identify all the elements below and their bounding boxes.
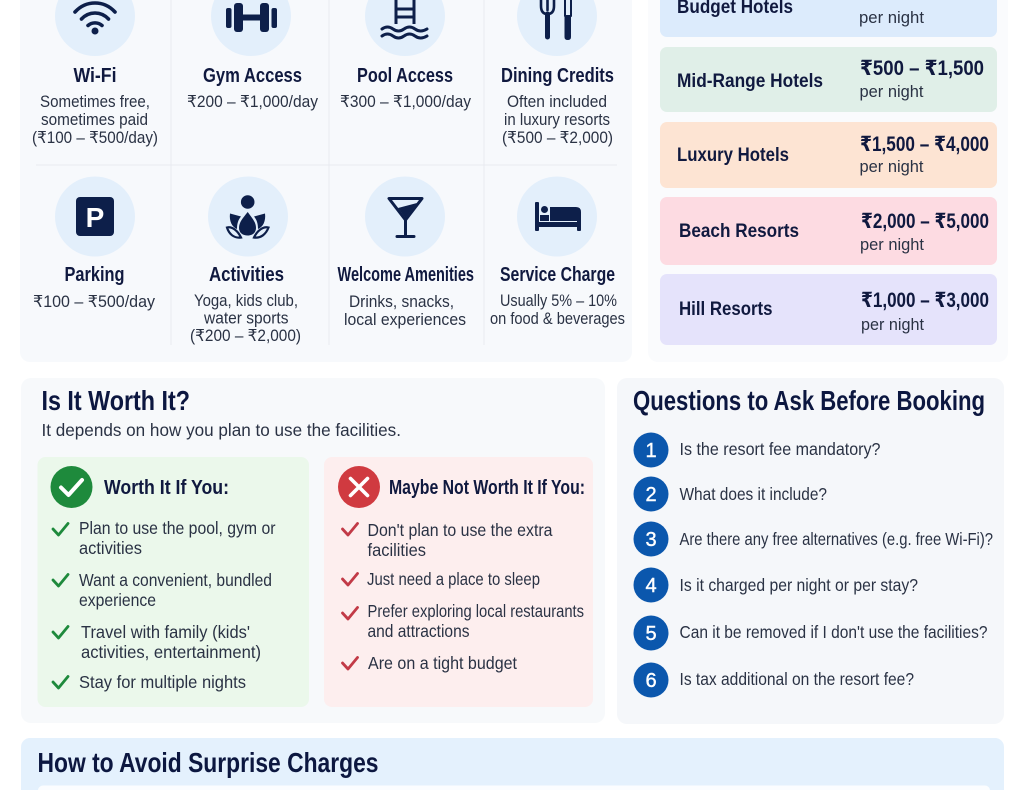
icon: green check circle xyxy=(50,466,92,508)
question 4 xyxy=(634,568,918,602)
amenity: Pool Access: Pool Access xyxy=(357,65,453,87)
amenity: Welcome Amenities: Welcome Amenities xyxy=(338,264,474,286)
row: Hill Resorts xyxy=(660,274,997,345)
card: worth it: activities xyxy=(79,538,142,558)
amenity: Activities: Yoga, kids club, xyxy=(194,292,298,310)
card: worth it: Want a convenient, bundled xyxy=(79,570,272,590)
row: Beach Resorts: ₹2,000 – ₹5,000 xyxy=(861,210,989,233)
amenity: Activities: Activities xyxy=(209,264,284,286)
question 1 xyxy=(634,432,881,468)
amenity: Activities xyxy=(190,176,301,345)
card: worth it: Worth It If You: xyxy=(104,477,229,499)
question 3 xyxy=(634,522,993,556)
card: worth it: Stay for multiple nights xyxy=(79,672,246,692)
row: Mid-Range Hotels: per night xyxy=(860,82,924,101)
amenity: Gym Access: ₹200 – ₹1,000/day xyxy=(187,93,319,111)
amenity: Parking: ₹100 – ₹500/day xyxy=(33,293,156,311)
amenity: Welcome Amenities: local experiences xyxy=(344,311,466,329)
icon: bed xyxy=(535,202,581,231)
amenity: Dining Credits: Often included xyxy=(507,93,607,111)
card: maybe not worth it: Maybe Not Worth It If You: xyxy=(389,477,585,499)
amenity: Wi-Fi: Wi-Fi xyxy=(74,65,116,87)
row: Hill Resorts: Hill Resorts xyxy=(679,298,773,320)
icon: fork and knife xyxy=(541,0,571,40)
amenity: Gym Access xyxy=(187,0,319,111)
amenity: Wi-Fi: (₹100 – ₹500/day) xyxy=(32,129,158,147)
question 4: 4 xyxy=(645,575,657,597)
amenity: Dining Credits: (₹500 – ₹2,000) xyxy=(502,129,613,147)
row: Luxury Hotels: per night xyxy=(860,157,924,176)
icon: pool ladder xyxy=(382,0,427,38)
row: Hill Resorts: per night xyxy=(861,315,924,334)
question 3: 3 xyxy=(645,529,657,551)
question 5 xyxy=(634,616,988,650)
question 2 xyxy=(634,476,827,512)
card: maybe not worth it: Just need a place to sleep xyxy=(367,569,540,589)
question 4: Is it charged per night or per stay? xyxy=(680,575,918,595)
card: worth it: activities, entertainment) xyxy=(81,642,261,662)
icon: dumbbell xyxy=(226,3,277,32)
amenity: Service Charge: on food & beverages xyxy=(490,310,625,328)
card: tips xyxy=(38,786,990,790)
amenity: Dining Credits: Dining Credits xyxy=(501,65,614,87)
icon: cocktail glass xyxy=(389,198,422,236)
amenity: Service Charge xyxy=(490,176,625,328)
amenity: Pool Access: ₹300 – ₹1,000/day xyxy=(340,93,472,111)
heading: Is It Worth It?: Is It Worth It? xyxy=(42,385,190,416)
row: Luxury Hotels xyxy=(660,122,997,188)
panel: questions to ask before booking xyxy=(617,378,1004,724)
row: Budget Hotels: per night xyxy=(859,8,924,27)
amenity: Dining Credits xyxy=(501,0,614,147)
question 6: 6 xyxy=(645,670,657,692)
amenity: Activities: water sports xyxy=(203,310,288,328)
row: Beach Resorts: Beach Resorts xyxy=(679,220,799,242)
heading: How to Avoid Surprise Charges: How to Avoid Surprise Charges xyxy=(38,747,378,778)
subheading: It depends on how you plan to use the facilities. xyxy=(42,420,401,440)
amenity: Welcome Amenities xyxy=(338,176,474,329)
card: maybe not worth it: Prefer exploring local restaurants xyxy=(368,601,584,621)
icon: lotus xyxy=(227,195,268,238)
question 1: Is the resort fee mandatory? xyxy=(680,439,881,459)
amenity: Pool Access xyxy=(340,0,472,111)
icon: red cross circle xyxy=(338,466,380,508)
question 2: 2 xyxy=(645,484,657,506)
amenity: Dining Credits: in luxury resorts xyxy=(504,111,610,129)
row: Mid-Range Hotels: Mid-Range Hotels xyxy=(677,70,823,92)
question 6: Is tax additional on the resort fee? xyxy=(680,669,914,689)
row: Budget Hotels xyxy=(660,0,997,37)
card: worth it xyxy=(38,457,309,707)
card: maybe not worth it xyxy=(324,457,593,707)
row: Beach Resorts: per night xyxy=(860,235,924,254)
row: Luxury Hotels: Luxury Hotels xyxy=(677,144,789,166)
question 1: 1 xyxy=(645,440,657,462)
card: maybe not worth it: Don't plan to use the extra xyxy=(368,520,553,540)
card: worth it: experience xyxy=(79,590,156,610)
panel: typical resort fees by property type xyxy=(648,0,1008,362)
panel: how to avoid surprise charges xyxy=(21,738,1004,790)
icon: parking sign: P xyxy=(86,202,104,233)
row: Mid-Range Hotels: ₹500 – ₹1,500 xyxy=(860,57,984,80)
amenity: Welcome Amenities: Drinks, snacks, xyxy=(349,293,454,311)
amenity: Wi-Fi: Sometimes free, xyxy=(40,93,150,111)
question 6 xyxy=(634,662,914,698)
row: Beach Resorts xyxy=(660,197,997,265)
panel: is it worth it xyxy=(21,378,605,723)
amenity: Wi-Fi xyxy=(32,0,158,147)
card: maybe not worth it: Are on a tight budget xyxy=(368,653,517,673)
amenity: Gym Access: Gym Access xyxy=(203,65,302,87)
question 2: What does it include? xyxy=(680,484,827,504)
amenity: Parking: Parking xyxy=(64,264,124,286)
icon: wifi xyxy=(75,3,115,34)
card: worth it: Travel with family (kids' xyxy=(81,622,250,642)
card: maybe not worth it: and attractions xyxy=(368,621,470,641)
panel: extra charges by amenity xyxy=(20,0,632,362)
question 5: Can it be removed if I don't use the facilities? xyxy=(680,622,988,642)
row: Luxury Hotels: ₹1,500 – ₹4,000 xyxy=(860,133,989,156)
card: worth it: Plan to use the pool, gym or xyxy=(79,518,276,538)
card: maybe not worth it: facilities xyxy=(368,540,426,560)
question 5: 5 xyxy=(645,623,657,645)
row: Mid-Range Hotels xyxy=(660,47,997,112)
row: Hill Resorts: ₹1,000 – ₹3,000 xyxy=(861,289,989,312)
amenity: Service Charge: Service Charge xyxy=(500,264,615,286)
amenity: Service Charge: Usually 5% – 10% xyxy=(500,292,617,310)
amenity: Parking xyxy=(33,176,156,311)
amenity: Wi-Fi: sometimes paid xyxy=(41,111,148,129)
amenity: Activities: (₹200 – ₹2,000) xyxy=(190,327,301,345)
